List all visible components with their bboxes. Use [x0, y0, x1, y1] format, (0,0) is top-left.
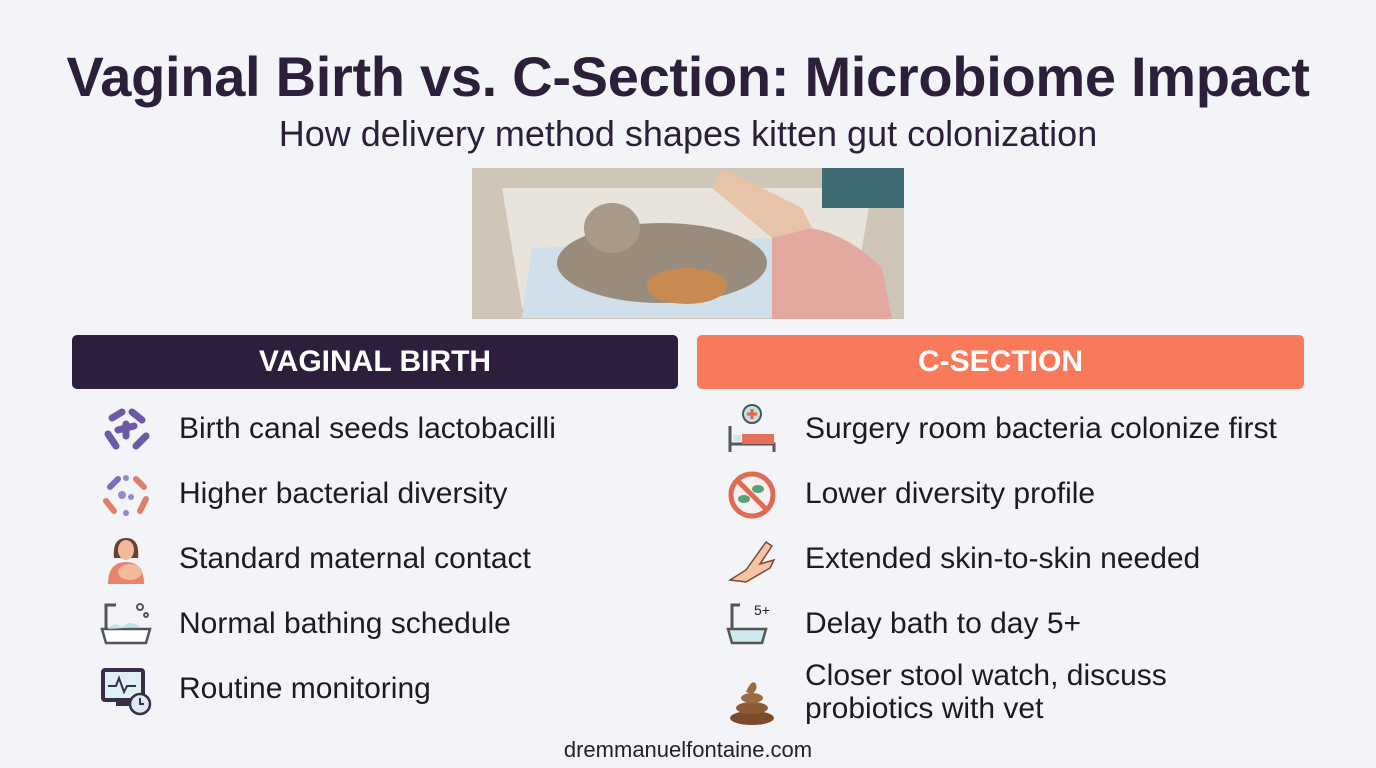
text: Normal bathing schedule [179, 607, 511, 640]
panel: vaginal birth list [100, 408, 556, 716]
header: c-section: C-SECTION [918, 345, 1083, 378]
header: c-section [697, 335, 1304, 389]
text: Delay bath to day 5+ [805, 607, 1081, 640]
footer: dremmanuelfontaine.com [564, 737, 812, 762]
text: Lower diversity profile [805, 477, 1095, 510]
text: Extended skin-to-skin needed [805, 542, 1200, 575]
icon: hands [728, 541, 776, 583]
icon: bacteria [104, 408, 150, 450]
icon: bathtub 5+: 5+ [754, 602, 770, 618]
icon: bathtub [100, 603, 152, 644]
panel: c-section list [726, 404, 1277, 725]
icon: mother holding baby [108, 538, 144, 584]
header: vaginal birth: VAGINAL BIRTH [259, 345, 491, 378]
text: Birth canal seeds lactobacilli [179, 412, 556, 445]
icon: monitor with clock [101, 668, 152, 716]
text: Closer stool watch, discuss [805, 659, 1167, 692]
text: probiotics with vet [805, 692, 1043, 725]
text: Higher bacterial diversity [179, 477, 507, 510]
text: Surgery room bacteria colonize first [805, 412, 1277, 445]
icon: hospital bed [728, 404, 776, 452]
subtitle: How delivery method shapes kitten gut colonization [279, 113, 1097, 154]
icon: no bacteria [728, 472, 776, 518]
text [805, 659, 1167, 725]
icon: stool [730, 682, 774, 725]
text: Routine monitoring [179, 672, 431, 705]
header: vaginal birth [72, 335, 678, 389]
illustration: cat nursing kittens [472, 168, 904, 319]
title: Vaginal Birth vs. C-Section: Microbiome Impact [66, 45, 1310, 108]
icon: diverse bacteria [103, 475, 149, 516]
text: Standard maternal contact [179, 542, 531, 575]
icon: bathtub 5+ [726, 602, 770, 644]
